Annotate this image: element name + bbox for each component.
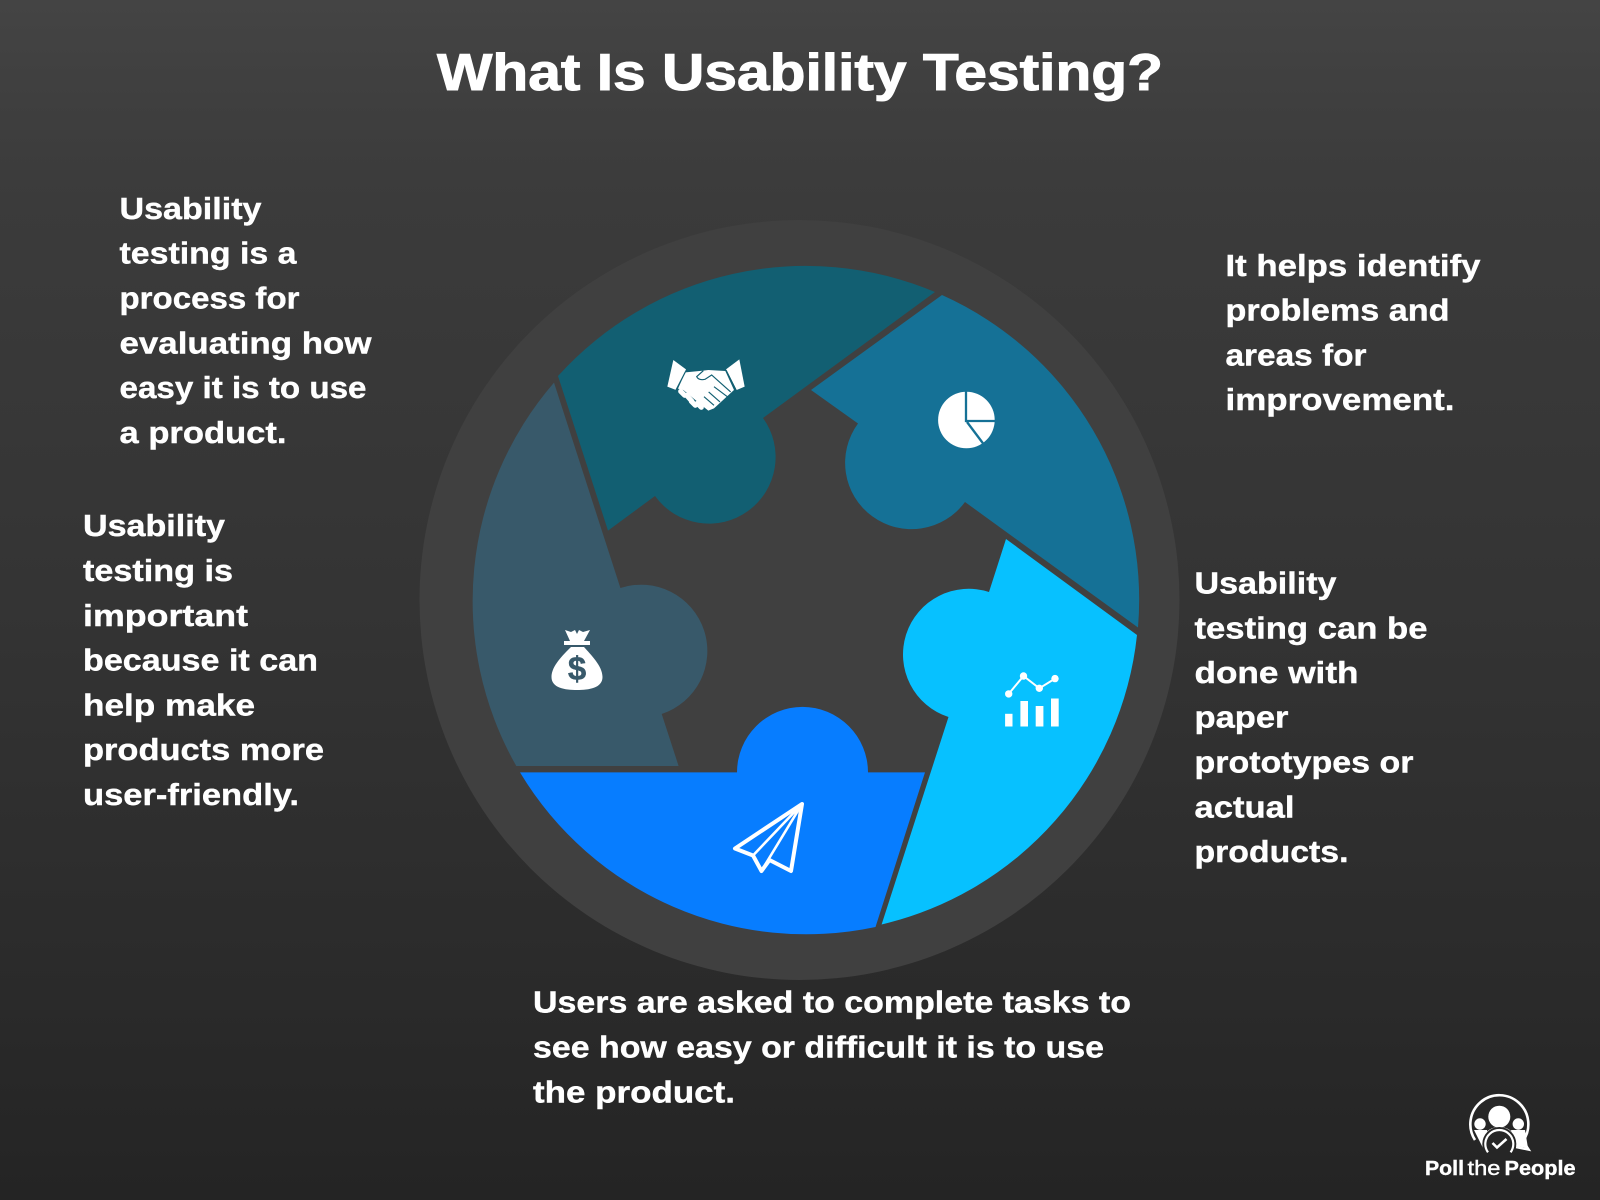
text block: importance: help make: [83, 687, 255, 722]
icon: paper plane: [735, 804, 802, 871]
text block: definition: Usability: [120, 191, 262, 226]
text block: definition: easy it is to use: [120, 370, 366, 405]
text block: definition: testing is a: [120, 236, 297, 271]
text block: prototypes: Usability: [1194, 565, 1337, 600]
text block: importance: important: [83, 598, 248, 633]
logo wordmark: [1425, 1158, 1576, 1180]
segment: teal top-left: [558, 266, 935, 531]
text block: tasks: Users are asked to complete tasks to: [533, 984, 1131, 1020]
text block: importance: user-friendly.: [83, 777, 299, 812]
text block: importance: because it can: [83, 643, 318, 678]
logo: Poll the People: [1425, 1095, 1576, 1180]
icon: money bag: $: [568, 650, 586, 687]
cycle diagram: [473, 266, 1139, 934]
text block: importance: products more: [83, 732, 324, 767]
text block: identify problems: problems and: [1226, 293, 1450, 328]
text block: prototypes: products.: [1194, 834, 1348, 869]
logo wordmark: the: [1468, 1158, 1500, 1180]
outer ring: [420, 220, 1180, 980]
text block: importance: [83, 508, 324, 812]
text block: tasks: [533, 984, 1131, 1109]
text block: tasks: the product.: [533, 1074, 735, 1109]
icon: money bag: [552, 630, 602, 690]
text block: prototypes: actual: [1194, 789, 1294, 824]
text block: prototypes: paper: [1194, 700, 1288, 735]
logo wordmark: People: [1504, 1158, 1576, 1180]
text block: identify problems: improvement.: [1226, 382, 1454, 417]
segment: slate left: [473, 383, 707, 766]
segment: cyan right: [882, 539, 1137, 924]
text block: identify problems: areas for: [1226, 337, 1366, 372]
text block: identify problems: It helps identify: [1226, 248, 1481, 283]
title: What Is Usability Testing?: [437, 44, 1163, 102]
segment: blue bottom: [520, 707, 925, 934]
text block: importance: testing is: [83, 553, 233, 588]
text block: prototypes: testing can be: [1194, 610, 1428, 645]
segment: blue top-right: [811, 295, 1139, 628]
text block: prototypes: [1194, 565, 1428, 869]
text block: definition: evaluating how: [120, 325, 372, 360]
icon: bar and line chart: [1005, 672, 1059, 726]
logo icon: people in ring: [1470, 1095, 1528, 1161]
text block: definition: a product.: [120, 415, 286, 450]
text block: tasks: see how easy or difficult it is to use: [533, 1029, 1104, 1064]
text block: importance: Usability: [83, 508, 226, 543]
text block: definition: process for: [120, 280, 300, 316]
text block: prototypes: done with: [1194, 655, 1358, 690]
icon: handshake: [667, 359, 745, 411]
text block: prototypes: prototypes or: [1194, 744, 1414, 780]
text block: definition: [120, 191, 372, 450]
text block: identify problems: [1226, 248, 1481, 417]
icon: pie chart: [938, 390, 1000, 452]
logo wordmark: Poll: [1425, 1158, 1464, 1180]
